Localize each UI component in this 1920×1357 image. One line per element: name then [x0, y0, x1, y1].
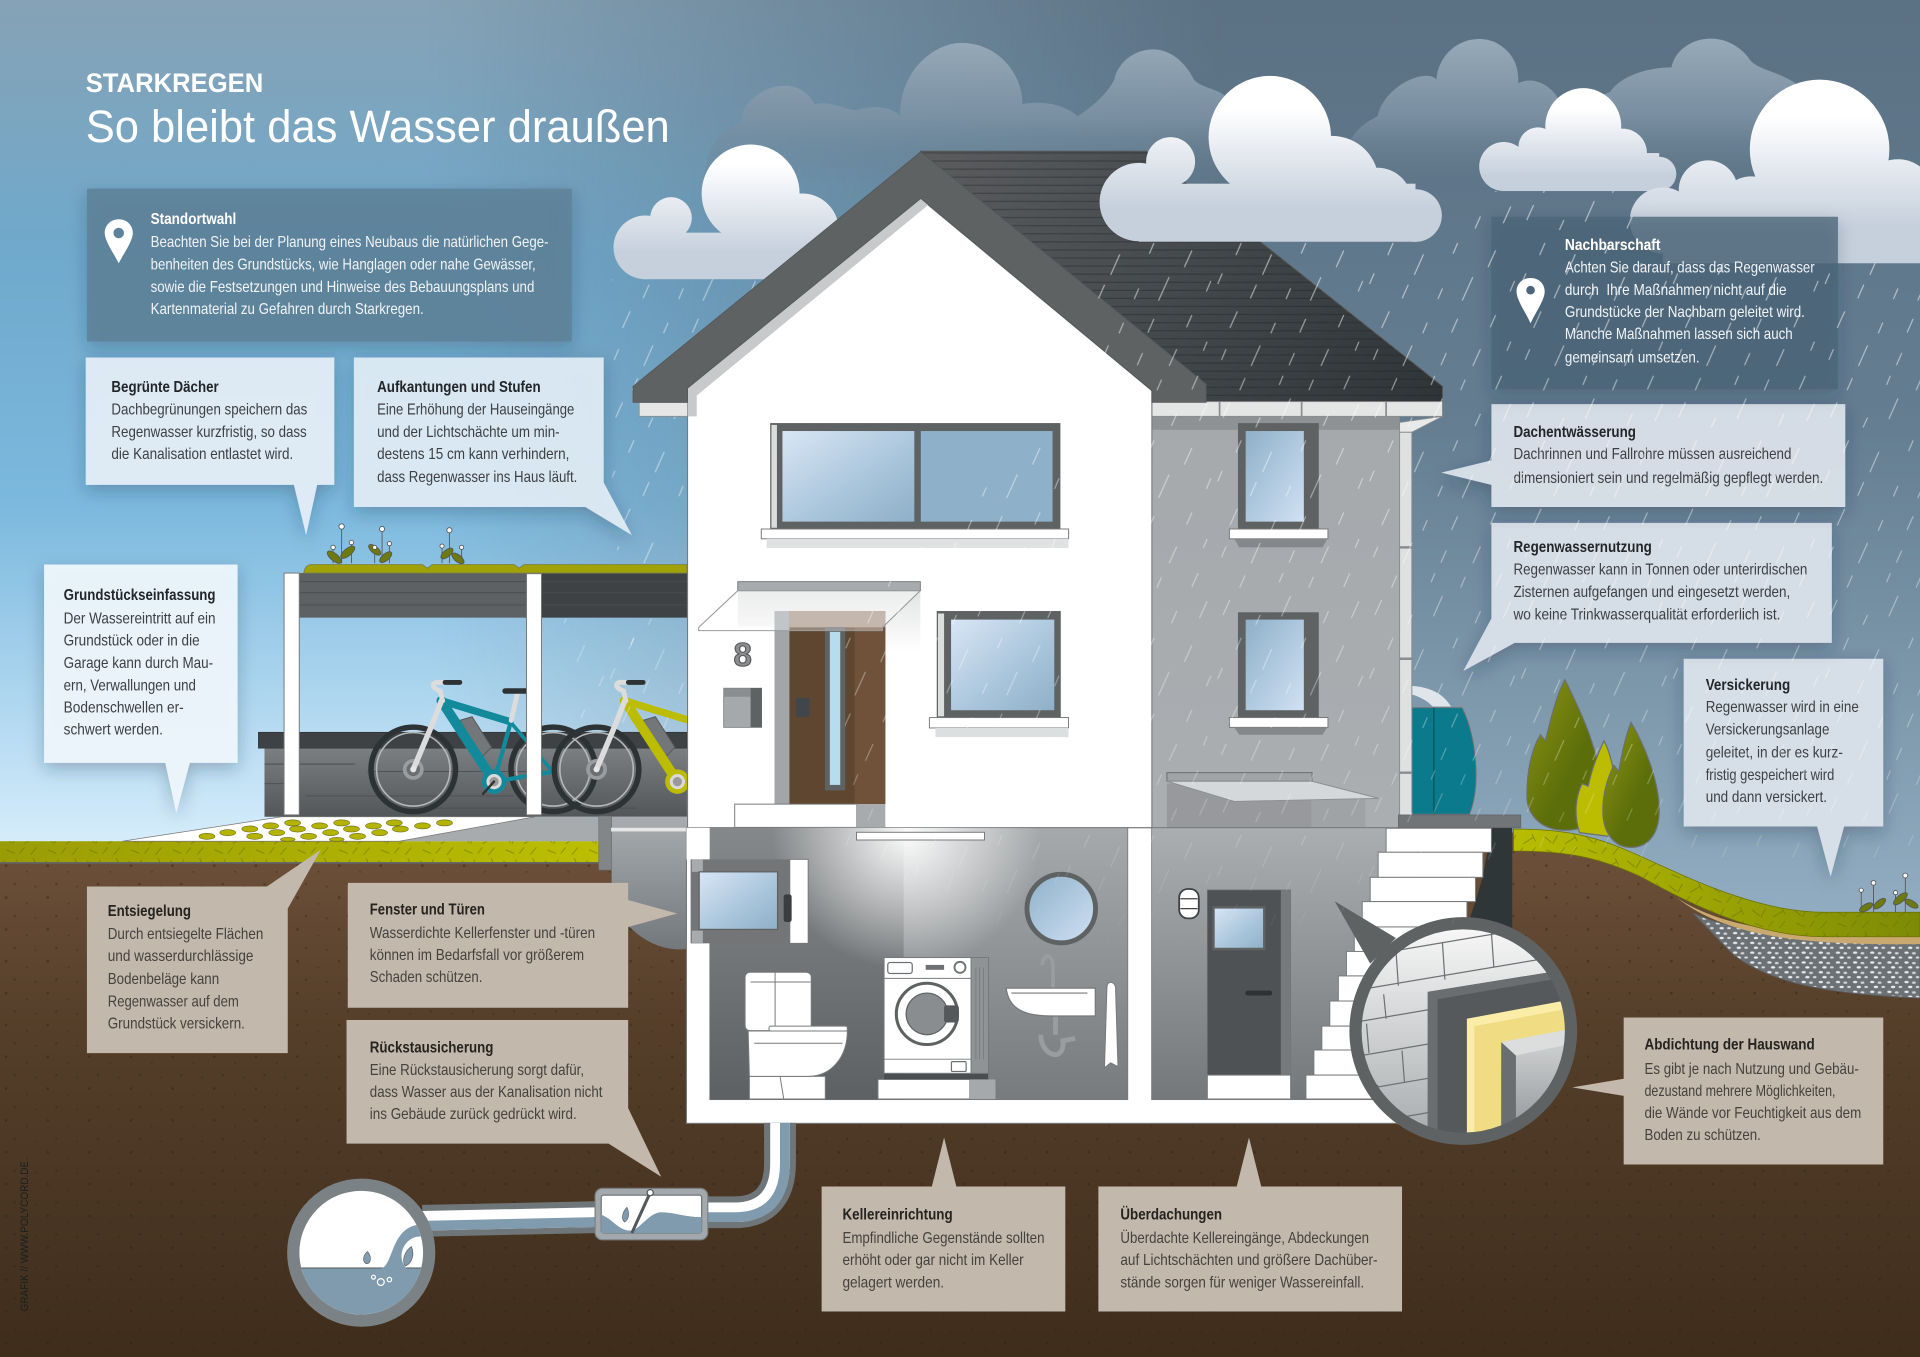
box: Dachentwässerung	[1441, 404, 1845, 507]
rain below left cloud	[612, 279, 808, 686]
box: Abdichtung der Hauswand	[1572, 1018, 1883, 1164]
backflow valve	[595, 1188, 708, 1240]
side upper window	[1229, 423, 1328, 547]
gravel trench	[1693, 913, 1920, 998]
box: Versickerung: Versickerung	[1706, 677, 1790, 694]
yellow bicycle	[554, 682, 693, 812]
mailbox	[724, 688, 762, 727]
box: Standortwahl	[87, 189, 572, 342]
box: Kellereinrichtung: Empfindliche Gegenstände sollten	[842, 1230, 1044, 1247]
box: Rückstausicherung	[347, 1020, 661, 1177]
box: Grundstückseinfassung	[44, 564, 238, 813]
box: Fenster und Türen: Wasserdichte Kellerfenster und -türen	[370, 925, 595, 942]
cloud: right large	[1630, 80, 1920, 263]
cloud: right small	[1479, 88, 1676, 191]
heavy rain over right side	[845, 191, 1920, 980]
box: Abdichtung der Hauswand: dezustand mehrere Möglichkeiten,	[1644, 1083, 1836, 1100]
box: Abdichtung der Hauswand: Boden zu schützen.	[1644, 1127, 1761, 1144]
box: Grundstückseinfassung: Grundstück oder in die	[64, 632, 200, 649]
washing machine	[878, 958, 996, 1099]
box: Regenwassernutzung: Regenwassernutzung	[1513, 539, 1652, 556]
box: Standortwahl: Kartenmaterial zu Gefahren durch Starkregen.	[151, 301, 424, 318]
ring	[1356, 923, 1571, 1139]
box: Versickerung: Regenwasser wird in eine	[1706, 699, 1859, 716]
box: Standortwahl: Standortwahl	[151, 211, 236, 228]
box: Entsiegelung	[87, 850, 321, 1053]
room left	[710, 828, 1128, 1100]
box: Dachentwässerung: Dachentwässerung	[1513, 424, 1636, 441]
wall layers	[1362, 929, 1565, 1133]
carport post left	[284, 573, 299, 815]
box: Nachbarschaft: Grundstücke der Nachbarn geleitet wird.	[1565, 304, 1805, 321]
basement section	[686, 815, 1521, 1123]
detail magnifier: wall waterproofing	[1335, 901, 1580, 1151]
box: Überdachungen: auf Lichtschächten und größere Dachüber-	[1120, 1252, 1378, 1269]
box: Fenster und Türen: Schaden schützen.	[370, 969, 482, 986]
box: Grundstückseinfassung: Der Wassereintritt auf ein	[64, 610, 216, 627]
green roof	[304, 564, 687, 573]
box: Versickerung: fristig gespeichert wird	[1706, 767, 1834, 784]
box: Entsiegelung: Regenwasser auf dem	[108, 994, 239, 1011]
headline: So bleibt das Wasser draußen	[86, 101, 670, 152]
ceiling light	[857, 832, 984, 840]
box: Entsiegelung: Entsiegelung	[108, 903, 191, 920]
box: Überdachungen: Überdachte Kellereingänge, Abdeckungen	[1120, 1229, 1369, 1247]
box: Dachentwässerung: Dachrinnen und Fallrohre müssen ausreichend	[1513, 446, 1791, 463]
box: Grundstückseinfassung: Grundstückseinfassung	[64, 587, 216, 604]
kicker: STARKREGEN	[86, 68, 263, 98]
box: Fenster und Türen: Fenster und Türen	[370, 902, 485, 919]
box: Begrünte Dächer: die Kanalisation entlastet wird.	[111, 446, 293, 463]
box: Entsiegelung: Bodenbeläge kann	[108, 971, 219, 988]
box: Überdachungen: Überdachungen	[1120, 1205, 1222, 1224]
trees	[1527, 680, 1659, 847]
box: Rückstausicherung: Rückstausicherung	[370, 1039, 493, 1056]
pointer	[1335, 901, 1396, 964]
pipe	[422, 1123, 785, 1226]
house number: 8	[733, 637, 752, 674]
roof plants	[325, 524, 466, 566]
garden wall	[258, 732, 687, 817]
driveway	[399, 817, 599, 841]
wall lamp	[1179, 889, 1199, 918]
box: Regenwassernutzung: Regenwasser kann in Tonnen oder unterirdischen	[1513, 561, 1807, 578]
downpipe and gutter	[1400, 416, 1442, 816]
box: Fenster und Türen	[348, 883, 677, 1008]
box: Versickerung: und dann versickert.	[1706, 789, 1827, 806]
box: Regenwassernutzung: wo keine Trinkwasserqualität erforderlich ist.	[1513, 607, 1780, 624]
towel	[1104, 982, 1118, 1068]
entrance door	[774, 611, 885, 804]
ground with soil texture	[0, 833, 1920, 1357]
box: Kellereinrichtung	[822, 1138, 1065, 1311]
box: Grundstückseinfassung: schwert werden.	[64, 722, 163, 739]
box: Überdachungen: stände sorgen für weniger Wassereinfall.	[1120, 1275, 1364, 1292]
icon: location pin	[105, 219, 133, 263]
sink	[1006, 956, 1095, 1055]
box: Standortwahl: benheiten des Grundstücks, wie Hanglagen oder nahe Gewässer,	[151, 256, 536, 273]
box: Begrünte Dächer: Dachbegrünungen speichern das	[111, 402, 307, 419]
box: Rückstausicherung: ins Gebäude zurück gedrückt wird.	[370, 1106, 577, 1123]
box: Regenwassernutzung: Zisternen aufgefangen und eingesetzt werden,	[1513, 584, 1790, 601]
box: Begrünte Dächer: Regenwasser kurzfristig, so dass	[111, 424, 307, 441]
box: Grundstückseinfassung: ern, Verwallungen und	[64, 678, 196, 695]
box: Aufkantungen und Stufen: dass Regenwasser ins Haus läuft.	[377, 469, 577, 486]
mirror	[1027, 874, 1096, 943]
door canopy	[699, 582, 920, 631]
box: Grundstückseinfassung: Garage kann durch Mau-	[64, 655, 213, 672]
entrance step	[735, 804, 885, 827]
box: Versickerung: Versickerungsanlage	[1706, 722, 1830, 739]
box: Nachbarschaft: Nachbarschaft	[1565, 237, 1661, 254]
rain inside carport	[539, 618, 686, 735]
box: Entsiegelung: Grundstück versickern.	[108, 1016, 245, 1033]
side canopy	[1167, 773, 1379, 828]
teal bicycle	[371, 682, 595, 812]
room right	[1152, 828, 1388, 1100]
white gable wall	[688, 202, 1152, 828]
box: Abdichtung der Hauswand: die Wände vor Feuchtigkeit aus dem	[1644, 1105, 1861, 1122]
box: Grundstückseinfassung: Bodenschwellen er-	[64, 700, 184, 717]
box: Nachbarschaft: Manche Maßnahmen lassen sich auch	[1565, 326, 1793, 343]
box: Abdichtung der Hauswand: Abdichtung der Hauswand	[1644, 1036, 1815, 1053]
left eave	[639, 402, 688, 416]
box: Aufkantungen und Stufen	[354, 358, 632, 535]
carport post right	[527, 574, 541, 815]
light well	[599, 816, 687, 949]
gable roof edge	[633, 152, 1206, 402]
cellar door	[1207, 890, 1291, 1099]
box: Versickerung: geleitet, in der es kurz-	[1706, 744, 1843, 761]
upper window	[761, 423, 1069, 548]
exterior stairs	[1306, 828, 1491, 1099]
box: Überdachungen	[1098, 1138, 1402, 1311]
box: Aufkantungen und Stufen: und der Lichtschächte um min-	[377, 424, 560, 441]
box: Aufkantungen und Stufen: Aufkantungen und Stufen	[377, 379, 541, 396]
title block	[86, 68, 670, 152]
cloud: main over roof	[1100, 76, 1442, 242]
box: Entsiegelung: und wasserdurchlässige	[108, 948, 254, 965]
gable shadow	[688, 196, 928, 416]
house	[633, 151, 1442, 828]
credit line: GRAFIK // WWW.POLYCORD.DE	[19, 1161, 31, 1311]
side lower window	[1229, 612, 1328, 735]
box: Nachbarschaft: gemeinsam umsetzen.	[1565, 349, 1700, 366]
box: Nachbarschaft	[1491, 217, 1838, 389]
basement window	[686, 828, 808, 943]
sewer magnifier	[293, 1185, 429, 1341]
box: Nachbarschaft: Achten Sie darauf, dass das Regenwasser	[1565, 259, 1815, 276]
box: Regenwassernutzung	[1463, 523, 1832, 671]
box: Kellereinrichtung: erhöht oder gar nicht im Keller	[842, 1252, 1024, 1269]
storm clouds in background	[704, 39, 1824, 184]
cloud: left	[613, 145, 853, 279]
box: Kellereinrichtung: Kellereinrichtung	[842, 1207, 953, 1224]
box: Rückstausicherung: dass Wasser aus der Kanalisation nicht	[370, 1084, 603, 1101]
box: Aufkantungen und Stufen: destens 15 cm kann verhindern,	[377, 446, 569, 463]
box: Fenster und Türen: können im Bedarfsfall vor größerem	[370, 947, 584, 964]
box: Rückstausicherung: Eine Rückstausicherung sorgt dafür,	[370, 1062, 584, 1079]
box: Standortwahl: sowie die Festsetzungen und Hinweise des Bebauungsplans und	[151, 279, 534, 296]
drain pipe and backflow valve	[293, 1123, 785, 1341]
box: Dachentwässerung: dimensioniert sein und regelmäßig gepflegt werden.	[1513, 470, 1823, 487]
box: Abdichtung der Hauswand: Es gibt je nach Nutzung und Gebäu-	[1644, 1061, 1859, 1078]
permeable paving	[122, 817, 535, 841]
plants on hill	[1858, 873, 1919, 914]
side wall	[1152, 402, 1442, 828]
basement shell	[686, 828, 1399, 1123]
grass slope	[1513, 829, 1920, 937]
roof beam	[299, 573, 687, 618]
hill with grass and infiltration gravel	[1513, 829, 1920, 998]
door canopy shade	[738, 590, 920, 651]
icon: location pin	[1517, 278, 1545, 323]
carport	[122, 524, 693, 841]
box: Begrünte Dächer	[86, 358, 334, 535]
box: Nachbarschaft: durch Ihre Maßnahmen nicht auf die	[1565, 282, 1787, 299]
roof	[921, 151, 1442, 402]
box: Versickerung	[1684, 659, 1883, 877]
sky background	[0, 0, 1920, 912]
stair wall and landing	[1396, 815, 1521, 967]
toilet	[745, 972, 847, 1099]
rain barrel	[1406, 686, 1476, 814]
box: Kellereinrichtung: gelagert werden.	[842, 1275, 944, 1292]
box: Standortwahl: Beachten Sie bei der Planung eines Neubaus die natürlichen Gege-	[151, 234, 549, 251]
box: Aufkantungen und Stufen: Eine Erhöhung der Hauseingänge	[377, 402, 574, 419]
lower window	[929, 611, 1068, 737]
box: Begrünte Dächer: Begrünte Dächer	[111, 379, 219, 396]
sand layer	[1676, 898, 1920, 944]
grass strip left	[0, 841, 600, 864]
box: Entsiegelung: Durch entsiegelte Flächen	[108, 926, 263, 943]
